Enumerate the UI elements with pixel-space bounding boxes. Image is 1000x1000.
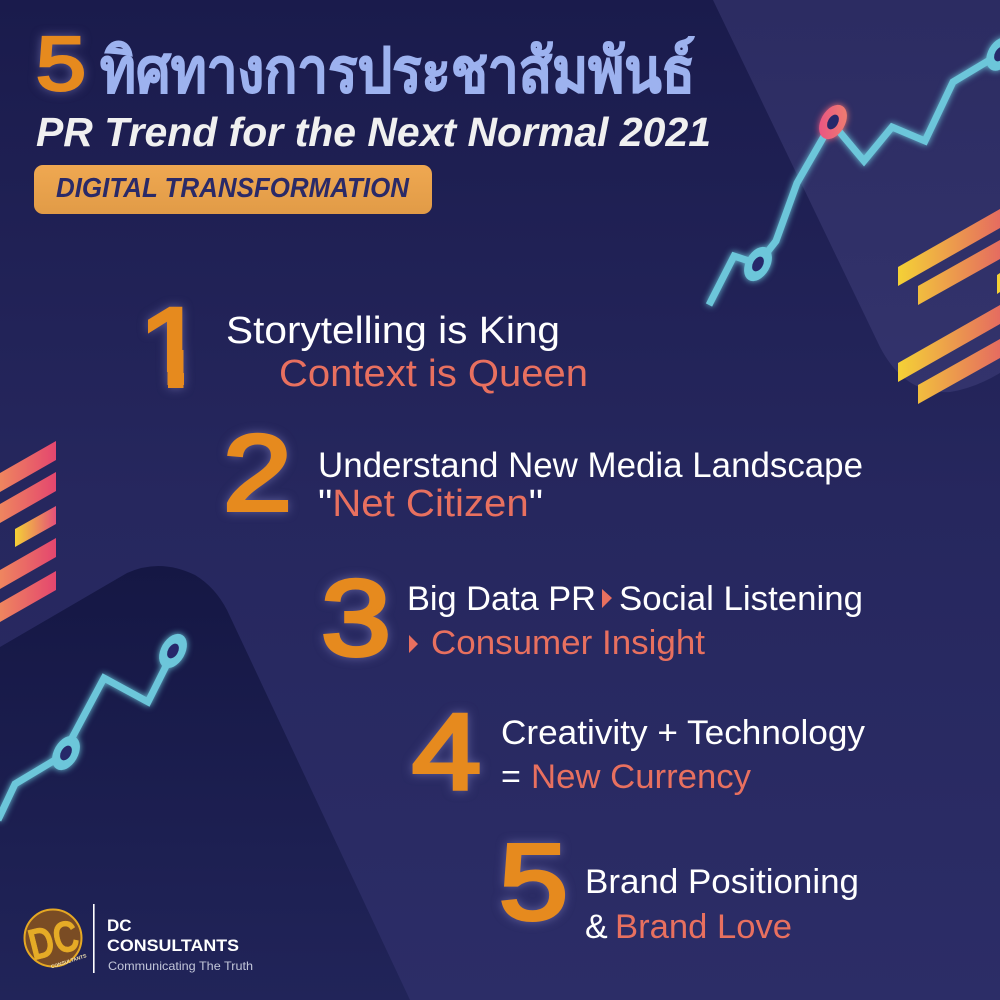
number 3: 3 xyxy=(321,557,391,678)
logo wordmark: DC xyxy=(107,916,132,935)
chart line: top right xyxy=(709,32,1000,305)
node: lower xyxy=(46,731,86,775)
item 1 xyxy=(144,302,586,394)
badge: digital transformation: DIGITAL TRANSFORMATION xyxy=(56,172,410,203)
item 5: Brand Love xyxy=(615,908,792,946)
title xyxy=(36,22,711,155)
text 2: Understand New Media Landscape xyxy=(318,446,863,485)
arrow xyxy=(602,589,612,608)
number 4: 4 xyxy=(412,691,481,812)
node: blue xyxy=(738,242,778,286)
item 3: Consumer Insight xyxy=(431,624,706,662)
node: right edge xyxy=(981,32,1000,76)
logo emblem: CONSULTANTS xyxy=(50,953,88,970)
item 5 xyxy=(499,821,859,946)
number 5: 5 xyxy=(499,821,568,942)
logo: DC Consultants xyxy=(23,904,253,973)
number 1 xyxy=(144,302,189,393)
text 3: Big Data PR xyxy=(407,580,596,618)
panel: lower left dark shape xyxy=(0,566,410,1000)
text 1: Storytelling is King xyxy=(226,310,560,352)
node: pink xyxy=(813,100,853,144)
logo divider xyxy=(93,904,95,973)
badge: digital transformation xyxy=(34,165,432,214)
item 4: New Currency xyxy=(531,758,751,796)
number 2: 2 xyxy=(223,412,292,533)
logo: DC Consultants: CONSULTANTS xyxy=(107,936,239,955)
text 4: Creativity + Technology xyxy=(501,714,865,752)
text 5: Brand Positioning xyxy=(585,863,859,901)
item 2 xyxy=(223,412,863,533)
number 1: 1 xyxy=(138,285,206,406)
title numeral 5: 5 xyxy=(36,22,86,107)
panel: top right lighter shape xyxy=(713,0,1000,392)
stripes: top right xyxy=(898,209,1000,404)
chart line: lower left xyxy=(0,629,193,820)
item 4: = xyxy=(501,758,521,796)
item 1: Context is Queen xyxy=(279,353,588,395)
title Thai heading: ทิศทางการประชาสัมพันธ์ xyxy=(100,36,695,106)
logo: DC Consultants: Communicating The Truth xyxy=(108,959,253,973)
item 3 xyxy=(321,557,863,678)
arrow xyxy=(409,635,418,653)
stripes: left xyxy=(0,441,56,622)
subtitle: PR Trend for the Next Normal 2021 xyxy=(36,109,711,155)
node: upper xyxy=(153,629,193,673)
item 5: & xyxy=(585,908,608,946)
logo emblem: DC xyxy=(23,911,84,970)
item 4 xyxy=(412,691,865,812)
item 3: Social Listening xyxy=(619,580,863,618)
item 2: "Net Citizen " xyxy=(318,483,543,525)
